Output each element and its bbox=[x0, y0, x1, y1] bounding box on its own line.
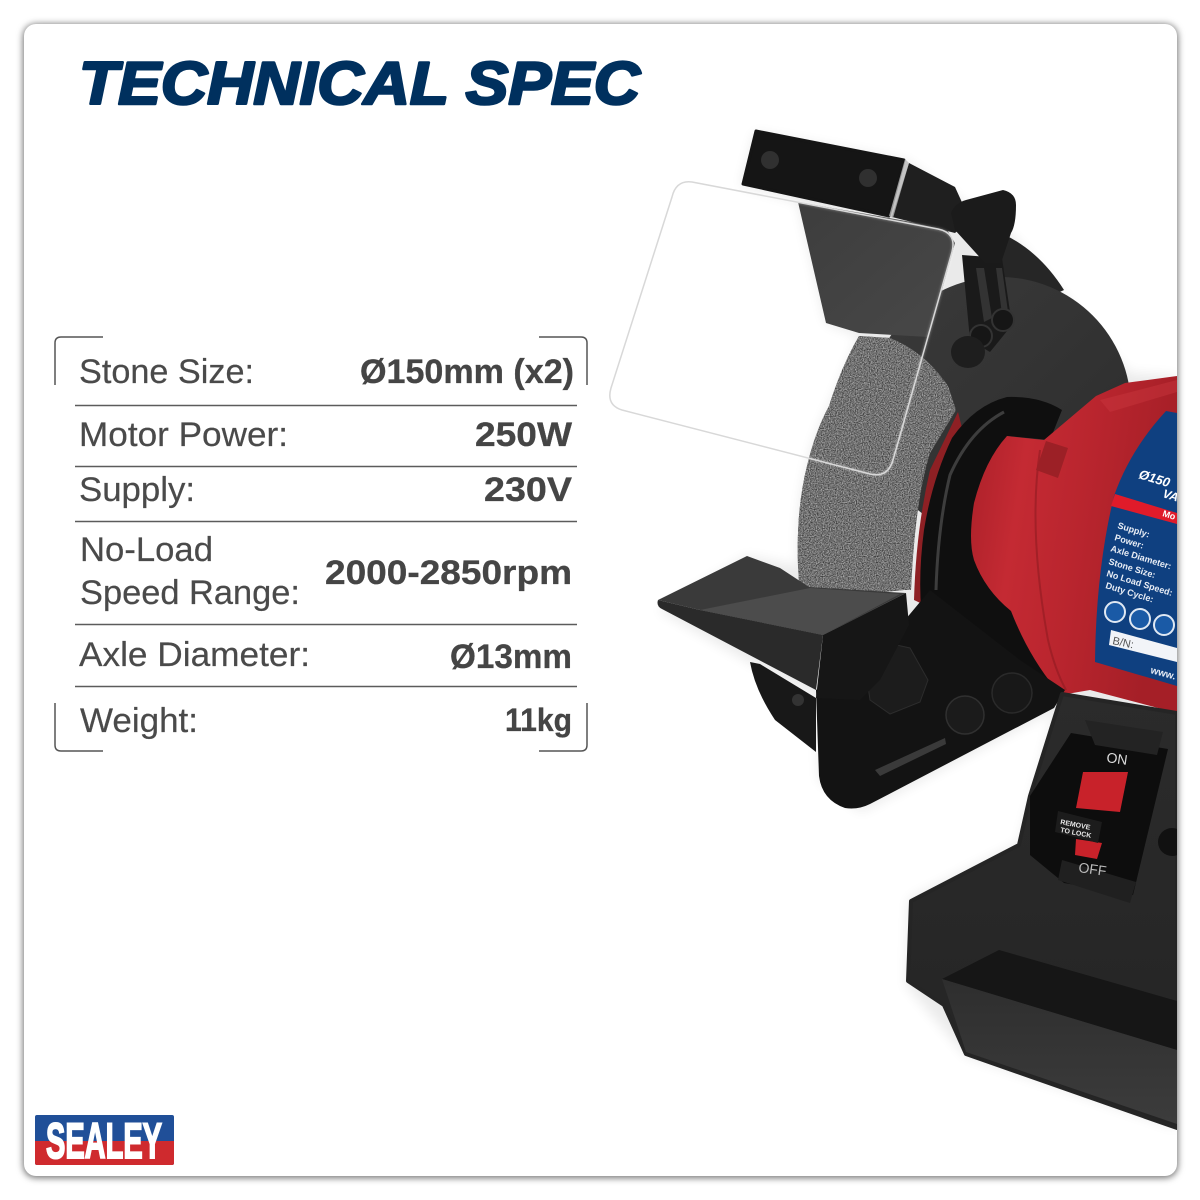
motor data label: B/N: bbox=[1111, 635, 1135, 651]
red flange edge bbox=[914, 412, 962, 603]
title: TECHNICAL SPEC bbox=[79, 50, 642, 117]
row: stone size: Stone Size: bbox=[79, 353, 254, 391]
motor data label: VA bbox=[1161, 486, 1180, 504]
row: motor power: 250W bbox=[475, 416, 573, 454]
storage tray bbox=[942, 950, 1177, 1124]
row: motor power: Motor Power: bbox=[79, 416, 288, 454]
transparent eye shield bbox=[610, 182, 953, 475]
wheel-guard front plate bbox=[798, 202, 955, 337]
row: axle diameter bbox=[79, 636, 572, 676]
illustration: bench grinder bbox=[610, 131, 1186, 1128]
row: no-load speed range: No-Load bbox=[80, 531, 213, 569]
row: axle diameter: Axle Diameter: bbox=[79, 636, 310, 674]
guard adjustment arms and bolts bbox=[951, 255, 1014, 368]
rear wheel guard bbox=[1002, 237, 1064, 292]
tool rest bbox=[658, 556, 909, 700]
row: no-load speed range bbox=[80, 531, 572, 612]
row: supply: 230V bbox=[484, 471, 572, 509]
on/off switch: ON bbox=[1106, 749, 1129, 768]
grinder base bbox=[908, 694, 1177, 1128]
row: no-load speed range: 2000-2850rpm bbox=[325, 554, 572, 592]
panel: specification table bbox=[55, 337, 587, 751]
row: supply bbox=[79, 471, 572, 509]
on/off switch: OFF bbox=[1078, 859, 1108, 879]
motor highlights bbox=[1036, 380, 1177, 690]
row: no-load speed range: Speed Range: bbox=[80, 574, 300, 612]
row: weight: 11kg bbox=[505, 702, 572, 738]
motor data label: Ø150 bbox=[1137, 467, 1173, 490]
motor data label: Axle Diameter: bbox=[1109, 543, 1173, 571]
wheel guard disc bbox=[889, 277, 1128, 513]
motor data label: Power: bbox=[1113, 532, 1145, 551]
on/off switch: TO LOCK bbox=[1060, 827, 1092, 840]
red motor housing bbox=[971, 376, 1177, 713]
row: stone size: Ø150mm (x2) bbox=[360, 353, 574, 391]
row: stone size bbox=[79, 353, 574, 391]
row: weight: Weight: bbox=[80, 702, 198, 740]
on/off switch: REMOVE bbox=[1060, 819, 1091, 832]
row: weight bbox=[80, 702, 572, 740]
motor data label: Supply: bbox=[1116, 520, 1151, 540]
logo: Sealey bbox=[35, 1113, 174, 1169]
motor data label: Mo bbox=[1161, 508, 1177, 522]
motor data label: No Load Speed: bbox=[1105, 568, 1174, 598]
machine soft shadow bbox=[658, 132, 1177, 1128]
grinding stone bbox=[798, 336, 956, 600]
guard knob bbox=[956, 190, 1016, 258]
on/off switch bbox=[1030, 720, 1168, 903]
row: supply: Supply: bbox=[79, 471, 195, 509]
motor data label bbox=[1095, 411, 1180, 686]
motor data label: Duty Cycle: bbox=[1104, 580, 1155, 604]
black motor collar bbox=[920, 396, 1062, 679]
logo: Sealey: SEALEY bbox=[46, 1113, 162, 1169]
row: axle diameter: Ø13mm bbox=[450, 638, 572, 676]
base hole bbox=[1158, 828, 1177, 856]
lower rest bracket bbox=[750, 590, 1065, 808]
table frame corners bbox=[55, 337, 587, 751]
motor data label: www. bbox=[1148, 665, 1177, 683]
motor data label: Stone Size: bbox=[1107, 556, 1157, 580]
top mounting bracket bbox=[743, 131, 970, 233]
row: motor power bbox=[79, 416, 573, 454]
